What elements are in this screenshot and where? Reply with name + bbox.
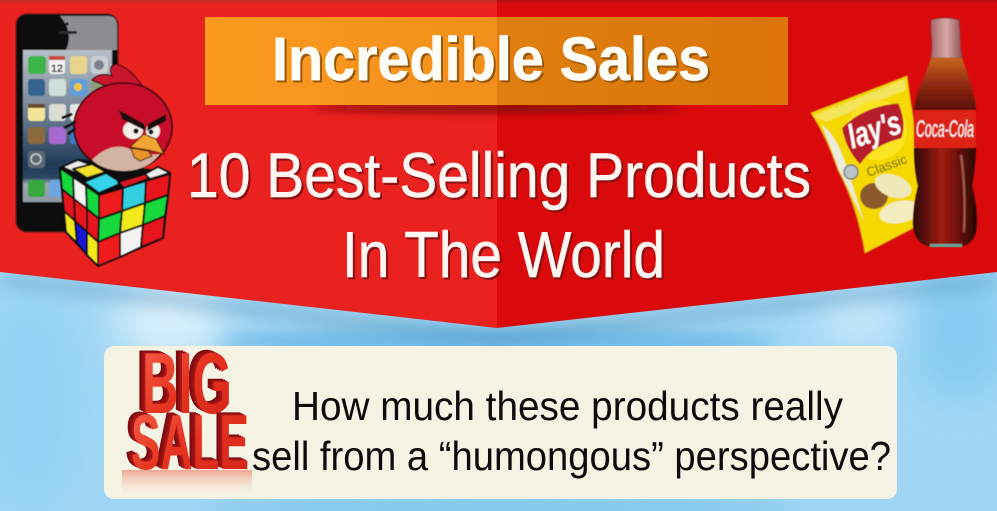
cube left face [60, 168, 74, 199]
lays logo [839, 101, 913, 166]
lays logo: lay's [843, 104, 906, 157]
red header ribbon [0, 0, 997, 328]
cola label [914, 110, 976, 148]
icon: bag of chips [811, 76, 923, 253]
app icons [28, 56, 108, 197]
icon: cola bottle [913, 18, 977, 247]
classic label: Classic [864, 151, 909, 180]
banner: Incredible Sales [205, 17, 788, 113]
cube top face [62, 160, 92, 173]
icon: big sale 3d text: SALE [131, 398, 249, 486]
heading: 10 Best-Selling Products: 10 Best-Selling Products [187, 141, 811, 211]
chips [860, 183, 888, 209]
heading: In The World: In The World [342, 218, 665, 291]
icon: smartphone [16, 14, 118, 232]
icon: big sale 3d text: BIG [142, 336, 232, 432]
cube right face [99, 188, 123, 219]
text: question line 2: sell from a “humongous” perspective? [252, 433, 891, 479]
icon: angry red bird [62, 64, 172, 171]
text: question line 1: How much these products really [292, 383, 843, 429]
panel: question box [104, 336, 897, 499]
icon: rubik's cube [60, 160, 170, 266]
icon: big sale 3d text [122, 336, 252, 498]
app icons: 12 [51, 63, 63, 75]
heading: Incredible Sales: Incredible Sales [272, 25, 710, 93]
